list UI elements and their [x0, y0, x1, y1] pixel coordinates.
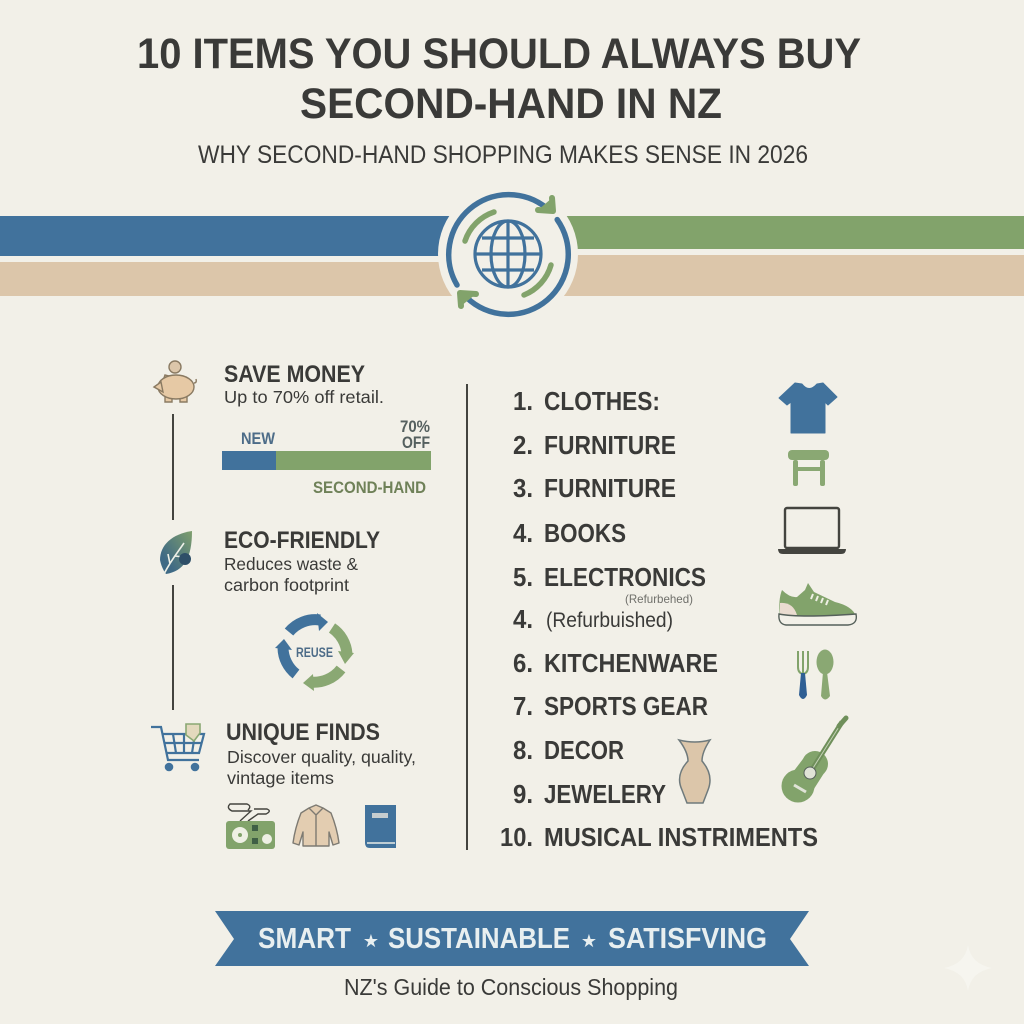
numbered list: BOOKS — [544, 518, 626, 548]
icon: vase — [679, 740, 710, 803]
banner — [215, 911, 809, 966]
icon: book — [365, 805, 396, 848]
panel: save money — [154, 361, 431, 497]
icon: jacket — [293, 805, 339, 846]
icon: radio — [226, 804, 275, 849]
timeline line upper — [172, 414, 174, 520]
numbered list: 7. — [513, 691, 533, 721]
numbered list: (Refurbuished) — [546, 609, 673, 632]
icon: reuse cycle — [275, 613, 354, 691]
numbered list: 4. — [513, 518, 533, 548]
bar chart: 70% — [400, 418, 430, 436]
icon: stool — [788, 450, 829, 486]
heading: SAVE MONEY — [224, 361, 365, 388]
numbered list: 8. — [513, 735, 533, 765]
numbered list: FURNITURE — [544, 430, 676, 460]
banner: SUSTAINABLE — [388, 923, 570, 955]
bar chart: SECOND-HAND — [313, 479, 426, 497]
bar chart — [222, 418, 431, 497]
numbered list: 4. — [513, 604, 533, 634]
numbered list: (Refurbehed) — [625, 592, 693, 606]
heading: ECO-FRIENDLY — [224, 527, 380, 554]
icon: globe with circular arrows — [438, 184, 578, 324]
banner: SATISFVING — [608, 923, 767, 955]
numbered list: 1. — [513, 386, 533, 416]
numbered list: DECOR — [544, 735, 624, 765]
column divider — [466, 384, 468, 850]
title — [137, 31, 861, 128]
banner: ★ — [581, 931, 597, 951]
banner: ★ — [363, 931, 379, 951]
watermark sparkle — [944, 945, 992, 991]
numbered list: CLOTHES: — [544, 386, 660, 416]
timeline line lower — [172, 585, 174, 710]
numbered list: MUSICAL INSTRIMENTS — [544, 822, 818, 852]
numbered list: FURNITURE — [544, 473, 676, 503]
panel: eco-friendly: carbon footprint — [224, 575, 349, 595]
icon: piggy bank — [154, 361, 196, 402]
panel: eco-friendly — [160, 527, 380, 691]
title: SECOND-HAND IN NZ — [300, 81, 722, 128]
panel: unique finds — [151, 719, 416, 849]
numbered list: ELECTRONICS — [544, 562, 706, 592]
heading: UNIQUE FINDS — [226, 719, 380, 746]
text: Reduces waste & — [224, 554, 358, 574]
icon: sneaker — [779, 583, 856, 625]
bar chart: OFF — [402, 434, 430, 452]
bar chart: NEW — [241, 430, 275, 448]
numbered list: 3. — [513, 473, 533, 503]
numbered list: 10. — [500, 822, 533, 852]
text: Discover quality, quality, — [227, 747, 416, 767]
icon: t-shirt — [779, 383, 837, 433]
subtitle: WHY SECOND-HAND SHOPPING MAKES SENSE IN 2026 — [198, 141, 808, 169]
title: 10 ITEMS YOU SHOULD ALWAYS BUY — [137, 31, 861, 78]
icon: shopping cart — [151, 724, 204, 770]
numbered list: 9. — [513, 779, 533, 809]
numbered list: SPORTS GEAR — [544, 691, 708, 721]
icon: leaf — [160, 531, 192, 574]
icon: fork and spoon — [798, 650, 834, 700]
icon: reuse cycle: REUSE — [296, 645, 333, 660]
numbered list: KITCHENWARE — [544, 648, 718, 678]
numbered list: 5. — [513, 562, 533, 592]
banner: SMART — [258, 923, 351, 955]
tagline: NZ's Guide to Conscious Shopping — [344, 974, 678, 1000]
header colour bands — [0, 216, 1024, 296]
numbered list: 6. — [513, 648, 533, 678]
numbered list: JEWELERY — [544, 779, 666, 809]
numbered list: 2. — [513, 430, 533, 460]
text: Up to 70% off retail. — [224, 387, 384, 407]
icon: laptop — [778, 508, 846, 554]
icon: guitar — [782, 718, 846, 802]
numbered list — [500, 386, 818, 852]
panel: unique finds: vintage items — [227, 768, 334, 788]
